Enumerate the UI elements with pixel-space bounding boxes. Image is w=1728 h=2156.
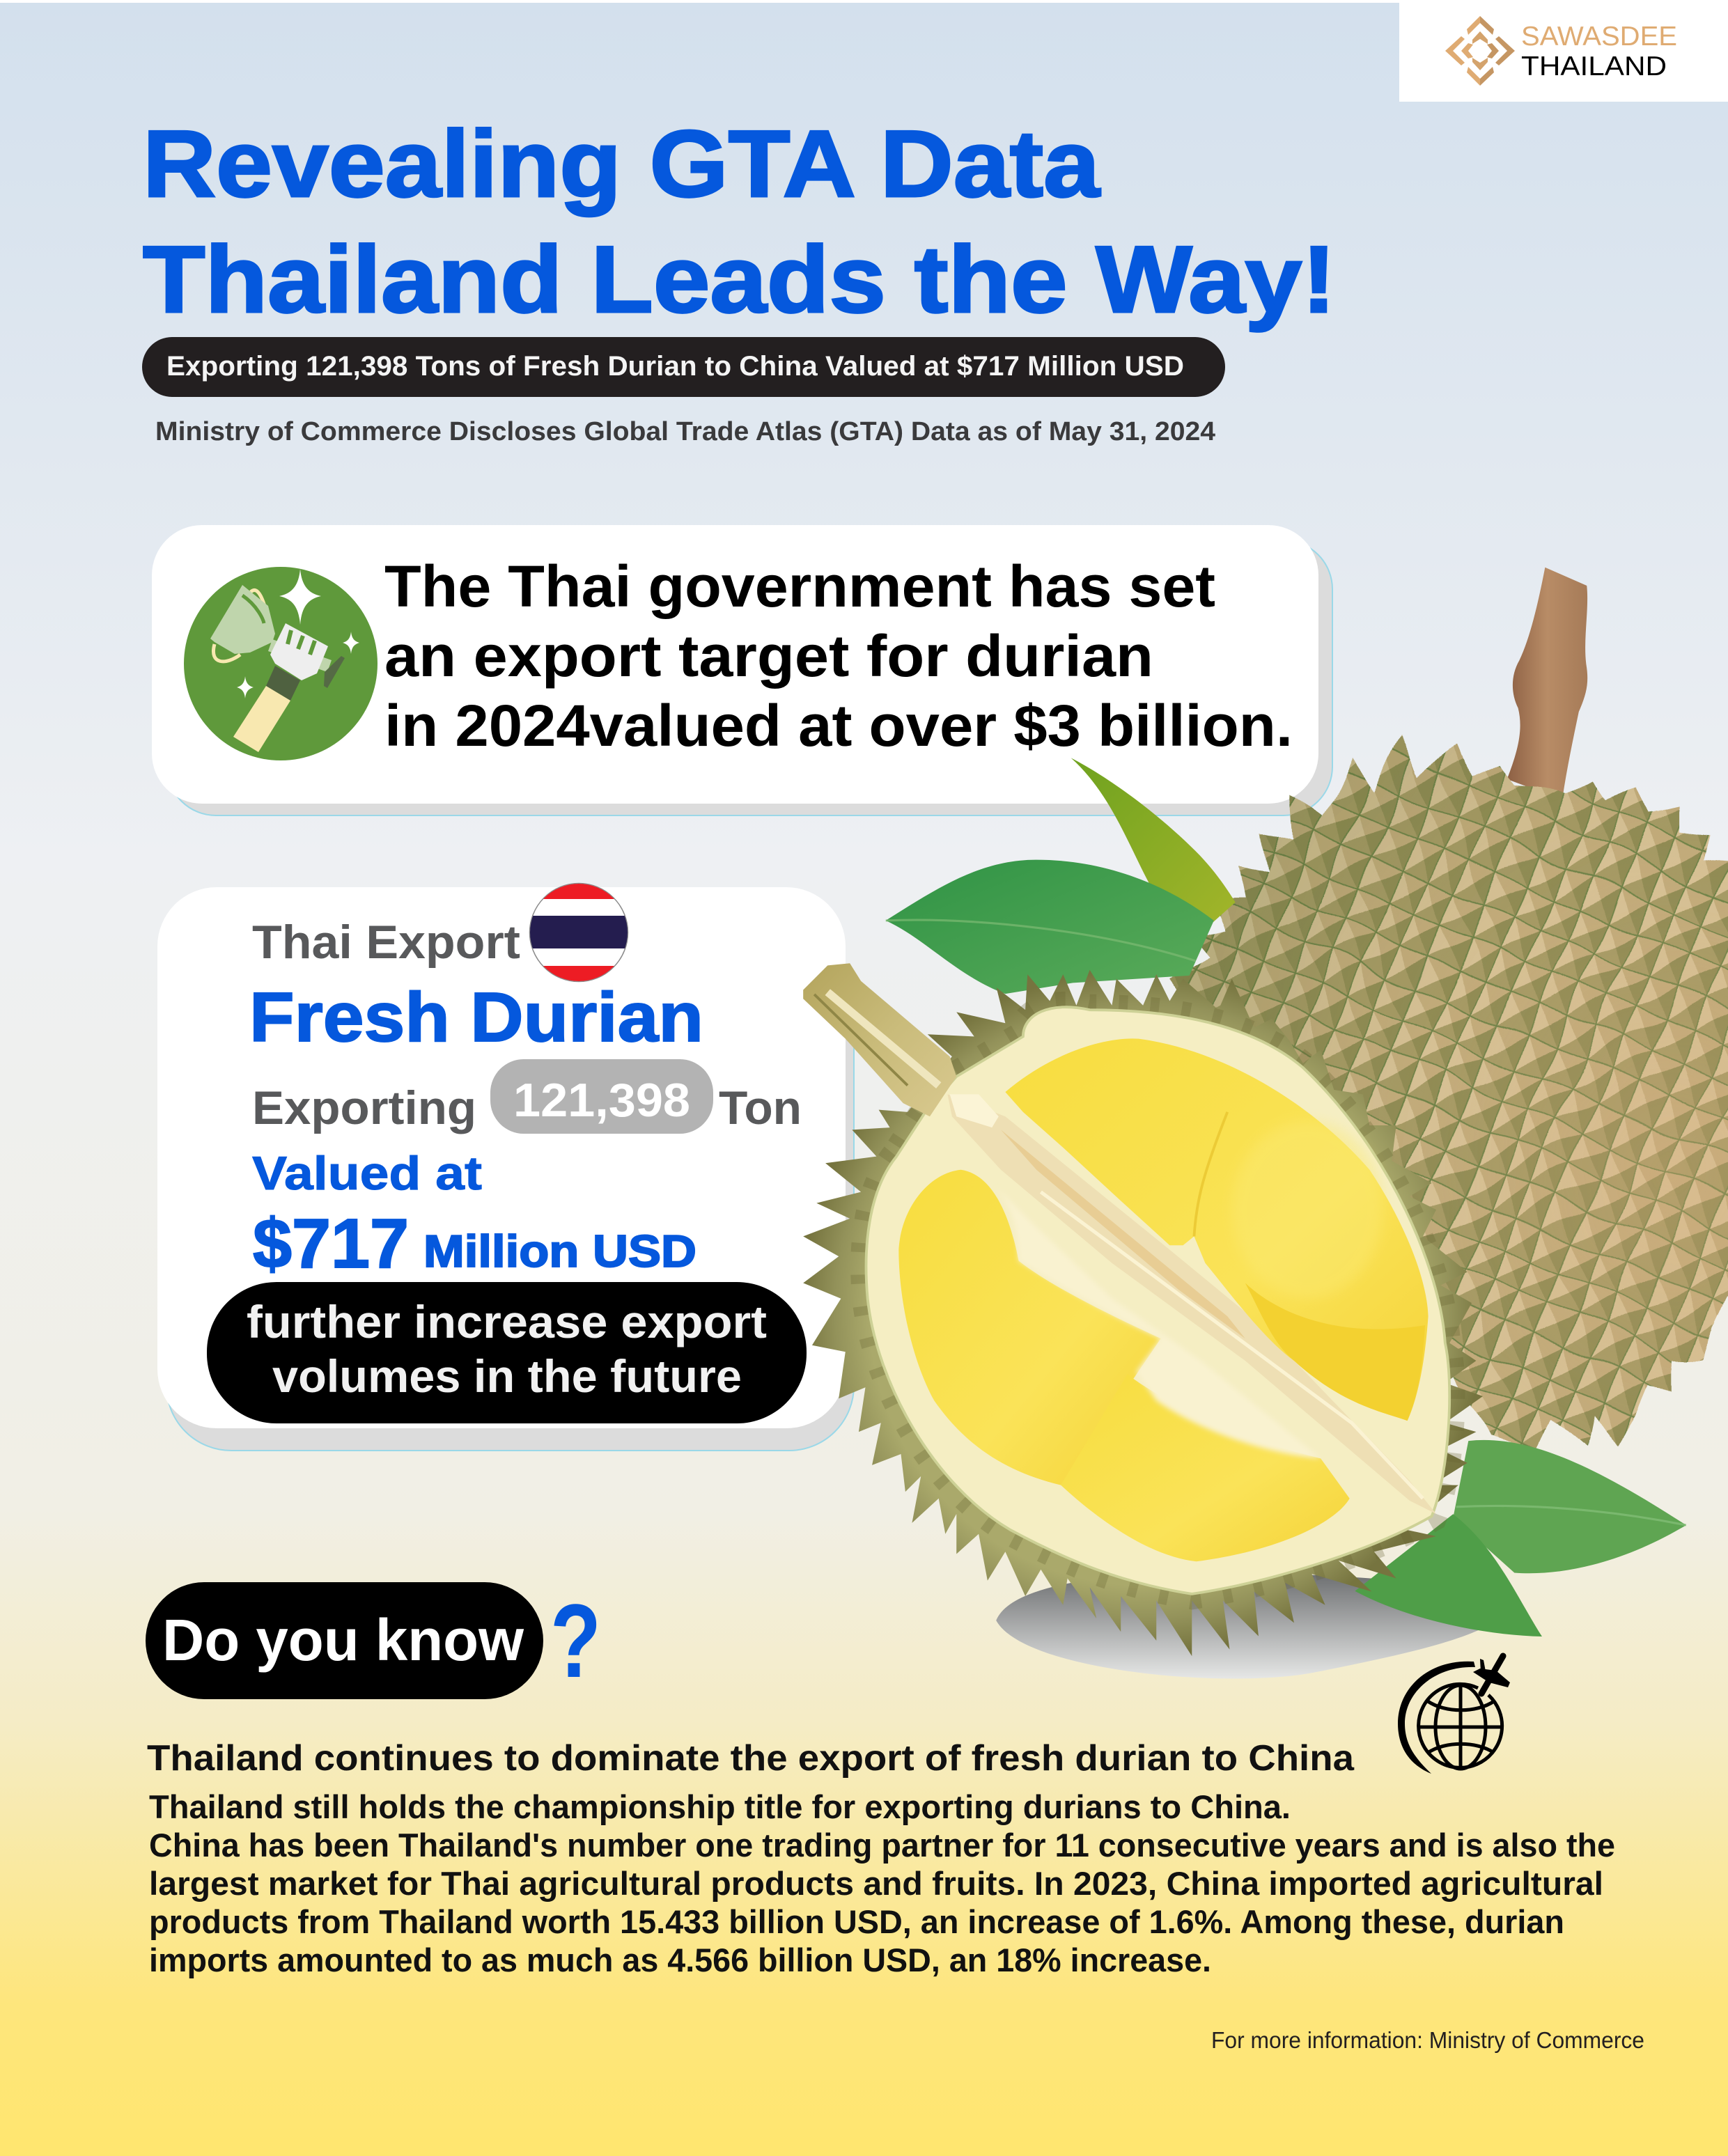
Do you know heading — [146, 1582, 601, 1699]
central core — [947, 1094, 1436, 1514]
durian flesh: lower right lobe — [1061, 1374, 1350, 1561]
whole durian — [1171, 741, 1728, 1448]
leaf: large top — [886, 860, 1214, 994]
body paragraph: largest market for Thai agricultural products and fruits. In 2023, China imported agricultural — [149, 1865, 1603, 1902]
Do you know heading: Do you know — [162, 1607, 524, 1673]
durian background illustration — [886, 568, 1728, 1678]
valued at label: Valued at — [252, 1147, 482, 1200]
card depth shadow — [166, 975, 854, 1451]
rind and cream interior — [866, 1007, 1449, 1594]
target text: in 2024valued at over $3 billion. — [384, 693, 1293, 758]
icon: globe and plane — [1398, 1656, 1510, 1774]
target text — [384, 554, 1293, 758]
section heading: Thailand continues to dominate the export of fresh durian to China — [147, 1738, 1355, 1779]
target text: an export target for durian — [384, 623, 1153, 689]
pale pith — [997, 1187, 1321, 1458]
subtitle pill: Exporting 121,398 Tons of Fresh Durian to China Valued at $717 Million USD — [166, 351, 1184, 382]
stem — [1507, 568, 1587, 799]
title: Revealing GTA Data — [143, 111, 1100, 217]
panel: export target — [152, 525, 1332, 815]
value figure — [253, 1205, 696, 1283]
exporting label: Exporting — [252, 1081, 476, 1134]
body paragraph: Thailand still holds the championship title for exporting durians to China. — [149, 1788, 1291, 1825]
leaf: yellow-green top — [1071, 758, 1236, 924]
body paragraph: China has been Thailand's number one trading partner for 11 consecutive years and is also the — [149, 1827, 1615, 1864]
logo wordmark — [1521, 22, 1677, 81]
card depth shadow — [167, 540, 1332, 815]
stalk — [803, 963, 956, 1116]
card — [152, 525, 1318, 804]
tonnage pill: 121,398 — [513, 1074, 690, 1127]
body paragraph: products from Thailand worth 15.433 billion USD, an increase of 1.6%. Among these, durian — [149, 1903, 1564, 1940]
target text: The Thai government has set — [384, 554, 1215, 619]
body paragraph: imports amounted to as much as 4.566 billion USD, an 18% increase. — [149, 1942, 1211, 1978]
leaf: bottom — [1355, 1514, 1542, 1636]
durian flesh: upper lobe — [1005, 1038, 1429, 1421]
Do you know heading: ? — [550, 1582, 601, 1699]
cut durian — [803, 963, 1483, 1656]
black callout — [207, 1282, 807, 1423]
logo wordmark: THAILAND — [1521, 52, 1667, 81]
panel: Thai export figures — [157, 883, 854, 1451]
ton label: Ton — [719, 1081, 802, 1134]
icon: Thai flag — [529, 883, 628, 982]
value figure: Million USD — [423, 1226, 696, 1276]
black callout: further increase export — [247, 1296, 767, 1348]
logo mark — [1445, 16, 1515, 86]
title: Thailand Leads the Way! — [143, 226, 1336, 332]
leaf: lower right — [1453, 1440, 1686, 1573]
icon: trophy in hand — [184, 567, 377, 760]
source note: For more information: Ministry of Commerce — [1211, 2027, 1644, 2053]
durian flesh: lower left lobe — [898, 1170, 1161, 1485]
subtitle pill — [142, 337, 1225, 397]
ground shadow — [996, 1572, 1511, 1678]
source line: Ministry of Commerce Discloses Global Trade Atlas (GTA) Data as of May 31, 2024 — [155, 417, 1215, 446]
heading: Thai Export: Thai Export — [252, 916, 520, 969]
title — [143, 111, 1336, 332]
card — [157, 887, 846, 1428]
heading: Fresh Durian: Fresh Durian — [249, 978, 703, 1056]
body paragraph — [149, 1788, 1615, 1978]
logo wordmark: SAWASDEE — [1521, 22, 1677, 52]
spiked shell — [803, 970, 1483, 1656]
logo: Sawasdee Thailand — [1399, 3, 1728, 102]
black callout: volumes in the future — [272, 1350, 742, 1402]
value figure: $717 — [253, 1205, 409, 1283]
tonnage pill — [490, 1059, 713, 1134]
